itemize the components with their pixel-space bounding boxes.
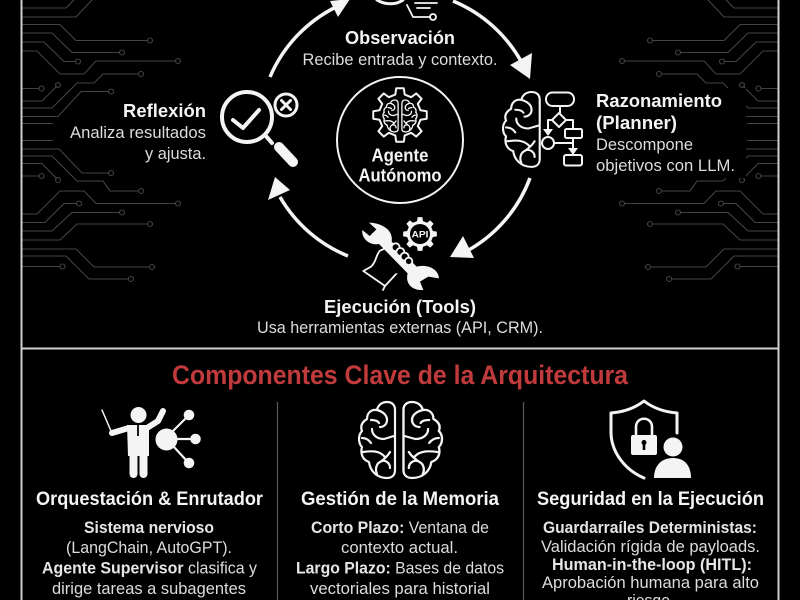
text: Observación (302, 27, 498, 69)
text: security body: Validación rígida de payloads. (541, 538, 760, 556)
text: Razonamiento: (Planner) (596, 112, 677, 133)
text: Reflexión (70, 100, 206, 163)
heading: Seguridad: Seguridad en la Ejecución (537, 488, 764, 510)
text: Reflexión: Analiza resultados (70, 123, 206, 142)
circuit decoration right (620, 0, 778, 282)
cycle arrow: tools to reflection (268, 177, 348, 256)
heading: Gestión de la Memoria: Gestión de la Memoria (301, 488, 499, 510)
text: orchestration body (42, 519, 258, 598)
cycle arrow: reflection to observation (270, 0, 350, 77)
text: Razonamiento: Descompone (596, 135, 693, 154)
label: Agente Autónomo (358, 144, 442, 186)
panel: memory (296, 402, 504, 598)
text: Observación: Recibe entrada y contexto. (302, 50, 498, 69)
text: memory body: Corto Plazo: Ventana de (311, 519, 489, 537)
text: Ejecución: Ejecución (Tools) (324, 296, 476, 317)
heading: Orquestación: Orquestación & Enrutador (36, 488, 263, 510)
icon: observation eye (377, 0, 437, 20)
text: Razonamiento: Razonamiento (596, 90, 722, 111)
text: orchestration body: dirige tareas a subagentes (52, 580, 246, 598)
icon: tools, wrench, hand and API gear: API (412, 230, 428, 240)
cycle arrow: observation to planning (453, 1, 532, 79)
icon: brain (359, 402, 442, 478)
text: Observación: Observación (345, 27, 455, 48)
label: Agente Autónomo: Agente (372, 144, 428, 166)
central agent circle (337, 77, 463, 203)
text: Reflexión: Reflexión (123, 100, 206, 121)
text: security body: Aprobación humana para alto (542, 574, 759, 592)
text: memory body: vectoriales para historial (310, 580, 490, 598)
icon: reflection magnifier (222, 92, 297, 162)
text: Ejecución: Usa herramientas externas (API, CRM). (257, 318, 543, 337)
text: orchestration body: Sistema nervioso (84, 519, 214, 537)
text: security body (541, 519, 760, 600)
text: Reflexión: y ajusta. (145, 144, 206, 163)
panel: security (537, 401, 764, 600)
text: Ejecución (257, 296, 543, 337)
text: memory body (296, 519, 504, 598)
icon: brain in gear (373, 88, 427, 142)
panel: agent cycle (22, 0, 778, 337)
icon: conductor and network (102, 407, 201, 474)
cycle arrow: planning to tools (450, 178, 530, 258)
text: security body: Guardarraíles Deterministas: (543, 519, 757, 537)
icon: shield, lock and user (611, 401, 691, 478)
label: Agente Autónomo: Autónomo (358, 164, 442, 186)
text: memory body: contexto actual. (341, 539, 458, 557)
text: orchestration body: (LangChain, AutoGPT). (66, 539, 232, 557)
text: orchestration body: Agente Supervisor clasifica y (42, 560, 258, 578)
text: security body: Human-in-the-loop (HITL): (552, 556, 752, 574)
heading: components: Componentes Clave de la Arquitectura (172, 360, 628, 390)
circuit decoration left (22, 0, 180, 282)
text: memory body: Largo Plazo: Bases de datos (296, 560, 504, 578)
icon: tools, wrench, hand and API gear (362, 217, 439, 290)
text: Razonamiento (596, 90, 735, 175)
panel: orchestration (36, 407, 263, 598)
column dividers (278, 402, 524, 600)
icon: planner brain and flowchart (503, 92, 582, 167)
text: Razonamiento: objetivos con LLM. (596, 156, 735, 175)
